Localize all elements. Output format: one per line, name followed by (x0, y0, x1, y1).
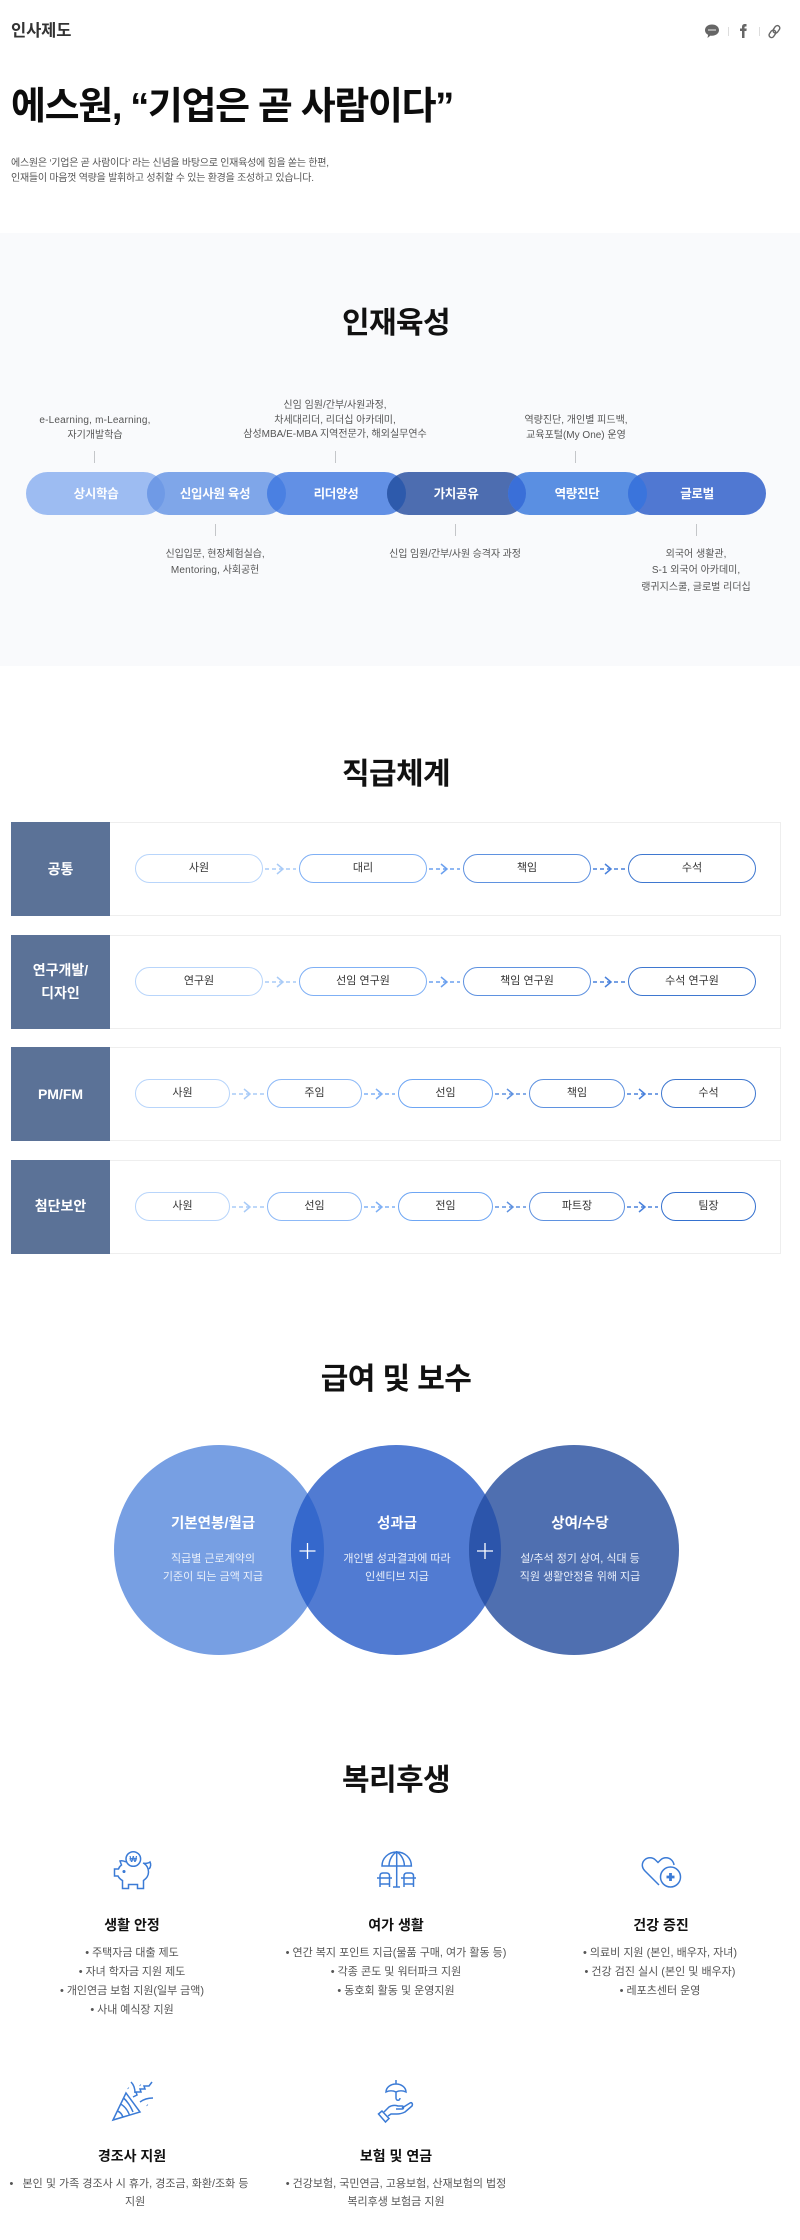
icon: plus (477, 1543, 493, 1559)
heading: talent development: 인재육성 (342, 306, 450, 340)
circle body: 직원 생활안정을 위해 지급 (520, 1571, 640, 1583)
rank pill: 팀장 (698, 1200, 719, 1212)
rank pill (299, 966, 427, 996)
benefit list: • 각종 콘도 및 워터파크 지원 (331, 1966, 461, 1978)
intro text (11, 157, 329, 184)
note: always-on learning: e-Learning, m-Learning, (39, 415, 151, 426)
benefit list: • 건강보험, 국민연금, 고용보험, 산재보험의 법정 (286, 2178, 506, 2190)
icon: umbrella over hand (378, 2080, 414, 2124)
circle body: 직급별 근로계약의 (171, 1553, 255, 1565)
circle body: 인센티브 지급 (365, 1571, 429, 1583)
rank pill (267, 1079, 362, 1108)
row label (11, 934, 110, 1028)
rank pill: 수석 (698, 1087, 719, 1099)
circle body: 기준이 되는 금액 지급 (163, 1571, 263, 1583)
icon: plus (300, 1543, 316, 1559)
heading: welfare: 복리후생 (342, 1764, 450, 1796)
note: leadership: 차세대리더, 리더십 아카데미, (274, 414, 396, 426)
circle title: 기본연봉/월급 (171, 1516, 255, 1532)
arrow (429, 864, 460, 874)
rank pill: 선임 연구원 (336, 974, 390, 986)
note: new hires (165, 548, 265, 576)
benefit list: • 본인 및 가족 경조사 시 휴가, 경조금, 화환/조화 등 (10, 2178, 248, 2190)
rank pill: 주임 (304, 1087, 325, 1099)
rank pill: 책임 (567, 1087, 587, 1099)
main title: 에스원, “기업은 곧 사람이다” (11, 86, 453, 128)
share icons (705, 24, 780, 38)
icon: kakao talk (705, 24, 719, 38)
circle body (163, 1552, 263, 1583)
benefit list: • 개인연금 보험 지원(일부 금액) (60, 1984, 204, 1996)
rank pill: 연구원 (184, 974, 214, 986)
intro text: 인재들이 마음껏 역량을 발휘하고 성취할 수 있는 환경을 조성하고 있습니다. (11, 172, 314, 184)
circle title: 상여/수당 (551, 1516, 609, 1532)
rank pill (628, 854, 756, 883)
rank pill (661, 1192, 756, 1220)
benefit list: • 주택자금 대출 제도 (85, 1946, 179, 1958)
icon: link (768, 25, 781, 39)
intro text: 에스원은 ‘기업은 곧 사람이다’ 라는 신념을 바탕으로 인재육성에 힘을 쏟는 한편, (11, 158, 329, 168)
benefit list (10, 2178, 248, 2208)
pill label: 역량진단 (555, 487, 599, 501)
rank pill (135, 1079, 230, 1108)
rank pill: 선임 (304, 1200, 325, 1212)
panel: talent development background (0, 233, 800, 666)
rank pill (463, 854, 591, 883)
rank pill: 파트장 (562, 1200, 592, 1212)
rank pill: 대리 (353, 862, 373, 874)
pill label: 리더양성 (314, 487, 358, 501)
note: value sharing: 신입 임원/간부/사원 승격자 과정 (389, 549, 521, 560)
rank pill (398, 1192, 493, 1220)
panel: common ranks (11, 822, 781, 916)
rank pill: 수석 연구원 (665, 974, 719, 986)
venn diagram: pay components (114, 1445, 679, 1655)
heading: rank system: 직급체계 (342, 758, 450, 790)
benefit title: 경조사 지원 (98, 2148, 166, 2164)
note: always-on learning (39, 415, 151, 440)
rank pill: 수석 (682, 862, 702, 874)
pill label: 상시학습 (74, 487, 118, 501)
circle body: 개인별 성과결과에 따라 (343, 1553, 451, 1565)
arrow (593, 864, 625, 874)
icon: piggy bank: ₩ (130, 1855, 138, 1864)
benefit list: 지원 (125, 2196, 145, 2208)
benefit title: 건강 증진 (633, 1917, 689, 1933)
note: leadership: 삼성MBA/E-MBA 지역전문가, 해외실무연수 (243, 429, 427, 440)
benefit list: • 동호회 활동 및 운영지원 (337, 1984, 455, 1996)
rank pill: 전임 (435, 1200, 456, 1212)
arrow (593, 976, 625, 988)
icon: party popper (112, 2082, 153, 2122)
benefit list: • 연간 복지 포인트 지급(물품 구매, 여가 활동 등) (286, 1946, 506, 1958)
rank pill: 사원 (172, 1087, 193, 1099)
benefit list: 복리후생 보험금 지원 (347, 2196, 445, 2208)
benefit list: • 건강 검진 실시 (본인 및 배우자) (585, 1966, 735, 1978)
benefit title: 보험 및 연금 (360, 2148, 432, 2164)
arrow (232, 1202, 264, 1212)
benefit list (60, 1946, 204, 2016)
note: global: 외국어 생활관, (666, 549, 726, 560)
pill label: 신입사원 육성 (180, 487, 250, 501)
arrow (495, 1088, 526, 1100)
panel: R&D and design ranks (11, 934, 781, 1028)
row label (11, 1160, 110, 1254)
benefit title: 여가 생활 (368, 1917, 424, 1933)
rank pill (135, 966, 263, 996)
arrow (495, 1202, 526, 1212)
benefit list: • 의료비 지원 (본인, 배우자, 자녀) (583, 1946, 737, 1958)
arrow (265, 864, 296, 874)
rank pill (661, 1079, 756, 1108)
note: leadership (243, 399, 427, 440)
arrow (364, 1202, 395, 1212)
note: new hires: Mentoring, 사회공헌 (171, 565, 259, 576)
rank pill (463, 966, 591, 996)
row label: 연구개발/ (33, 962, 88, 978)
arrow (364, 1088, 395, 1100)
icon: parasol and chairs (377, 1851, 416, 1888)
row label: 디자인 (41, 984, 80, 1000)
rank pill (135, 854, 263, 883)
row label: 공통 (48, 860, 73, 876)
note: competency: 역량진단, 개인별 피드백, (524, 415, 628, 426)
circle body (520, 1552, 640, 1583)
note: leadership: 신임 임원/간부/사원과정, (283, 400, 387, 411)
icon: piggy bank (114, 1851, 152, 1890)
row label: 첨단보안 (35, 1198, 86, 1214)
rank pill (398, 1079, 493, 1108)
arrow (265, 976, 296, 988)
rank pill (529, 1079, 625, 1108)
arrow (627, 1202, 658, 1212)
panel: PM/FM ranks (11, 1047, 781, 1141)
rank pill: 선임 (435, 1087, 456, 1099)
panel: advanced security ranks (11, 1160, 781, 1254)
rank pill: 책임 연구원 (500, 974, 554, 986)
benefit list: • 사내 예식장 지원 (90, 2004, 174, 2016)
heading: pay and compensation: 급여 및 보수 (321, 1362, 471, 1396)
arrow (429, 976, 460, 988)
page heading label: 인사제도 (11, 22, 71, 40)
arrow (232, 1088, 264, 1100)
note: global: S-1 외국어 아카데미, (652, 565, 740, 576)
rank pill (529, 1192, 625, 1220)
benefit list (286, 2178, 506, 2208)
rank pill: 사원 (189, 862, 209, 874)
rank pill (299, 854, 427, 883)
rank pill: 사원 (172, 1200, 193, 1212)
benefit list (286, 1946, 506, 1996)
arrow (627, 1088, 658, 1100)
note: competency (524, 414, 628, 440)
circle title: 성과급 (377, 1516, 417, 1532)
note: global (641, 548, 751, 593)
circle body: 설/추석 정기 상여, 식대 등 (520, 1553, 640, 1565)
note: competency: 교육포털(My One) 운영 (526, 430, 626, 440)
rank pill (267, 1192, 362, 1220)
benefit title: 생활 안정 (104, 1917, 160, 1933)
row label: PM/FM (38, 1086, 83, 1102)
pill label: 글로벌 (680, 487, 714, 501)
rank pill: 책임 (517, 862, 537, 874)
rank pill (628, 966, 756, 996)
note: global: 랭귀지스쿨, 글로벌 리더십 (641, 582, 751, 593)
benefit list (583, 1946, 737, 1996)
row label (11, 1047, 110, 1141)
row label (11, 822, 110, 916)
note: always-on learning: 자기개발학습 (67, 430, 123, 440)
icon: facebook (740, 24, 747, 38)
note: new hires: 신입입문, 현장체험실습, (165, 549, 265, 560)
benefit list: • 자녀 학자금 지원 제도 (79, 1966, 185, 1978)
rank pill (135, 1192, 230, 1220)
pill label: 가치공유 (434, 487, 478, 501)
icon: heart with medical plus (642, 1857, 682, 1888)
talent pipeline pills (26, 472, 766, 515)
circle body (343, 1552, 451, 1583)
benefit list: • 레포츠센터 운영 (620, 1984, 700, 1996)
